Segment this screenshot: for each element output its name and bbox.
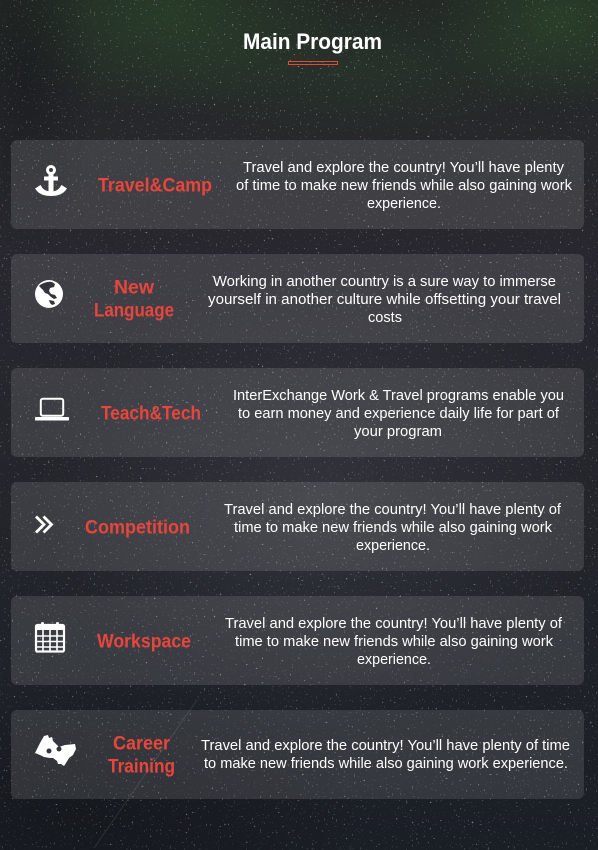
description: of time to make new friends while also gaining work bbox=[236, 177, 572, 194]
description: yourself in another culture while offsetting your travel bbox=[208, 291, 561, 308]
icon: laptop bbox=[35, 399, 69, 420]
description: Travel and explore the country! You’ll have plenty of bbox=[224, 501, 562, 518]
heading: New bbox=[114, 278, 154, 298]
description: costs bbox=[368, 309, 402, 326]
description: Travel and explore the country! You’ll have plenty of bbox=[225, 615, 563, 632]
icon: globe bbox=[35, 280, 63, 308]
icon: double chevron bbox=[36, 516, 52, 532]
description bbox=[225, 615, 563, 668]
panel: Workspace bbox=[11, 596, 584, 685]
heading: Language bbox=[94, 300, 174, 322]
heading: Training bbox=[108, 756, 175, 778]
heading: Competition bbox=[85, 518, 190, 538]
panel: Travel&Camp bbox=[11, 140, 584, 229]
description: to earn money and experience daily life for part of bbox=[238, 405, 560, 422]
description: time to make new friends while also gaining work bbox=[235, 633, 553, 650]
description: Travel and explore the country! You’ll have plenty bbox=[243, 159, 564, 176]
description: time to make new friends while also gaining work bbox=[234, 519, 552, 536]
heading: Travel&Camp bbox=[98, 176, 212, 196]
description: Travel and explore the country! You’ll have plenty of time bbox=[201, 737, 570, 754]
description bbox=[201, 737, 570, 772]
heading bbox=[94, 278, 174, 322]
icon: hands bbox=[35, 735, 76, 766]
panel: Teach&Tech bbox=[11, 368, 584, 457]
description bbox=[236, 159, 572, 212]
heading bbox=[108, 734, 175, 778]
heading: Career bbox=[113, 734, 171, 754]
description bbox=[224, 501, 562, 554]
description: to make new friends while also gaining work experience. bbox=[204, 755, 568, 772]
icon: calendar bbox=[36, 622, 64, 652]
description: experience. bbox=[357, 651, 431, 668]
description bbox=[208, 273, 561, 326]
description: experience. bbox=[356, 537, 430, 554]
panel: Career Training bbox=[11, 710, 584, 799]
title underline bbox=[288, 62, 338, 64]
icon: anchor bbox=[35, 165, 67, 196]
description: experience. bbox=[367, 195, 441, 212]
panel: Competition bbox=[11, 482, 584, 571]
description: your program bbox=[354, 423, 442, 440]
description: InterExchange Work & Travel programs enable you bbox=[233, 387, 564, 404]
heading: Workspace bbox=[97, 632, 191, 652]
heading: Teach&Tech bbox=[101, 404, 201, 424]
description: Working in another country is a sure way to immerse bbox=[213, 273, 556, 290]
description bbox=[233, 387, 564, 440]
panel: New Language bbox=[11, 254, 584, 343]
title: Main Program bbox=[243, 29, 382, 54]
